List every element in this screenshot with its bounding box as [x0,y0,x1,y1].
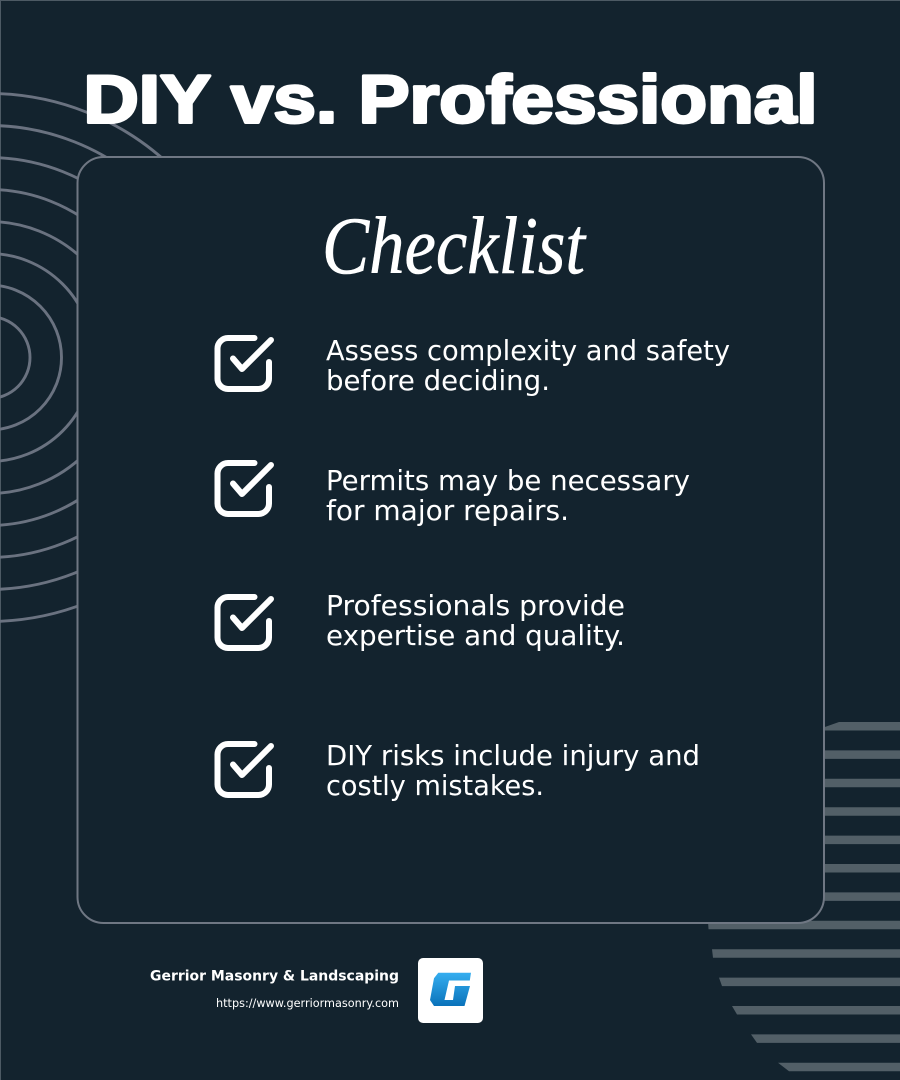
text: item 1: before deciding. [326,364,550,397]
text: item 2: for major repairs. [326,494,569,527]
title: DIY vs. Professional [84,62,818,138]
text: item 2: Permits may be necessary [326,464,690,497]
text: item 3: expertise and quality. [326,619,625,652]
decorative concentric circles [0,94,253,622]
text: item 3: Professionals provide [326,589,625,622]
heading: Checklist: Checklist [322,200,587,291]
footer: website url: https://www.gerriormasonry.com [216,996,399,1010]
panel: checklist card [78,157,824,923]
checklist item 4 [218,739,709,802]
icon: checkbox 4 [218,744,271,795]
decorative stripes [708,722,900,1071]
text: item 1: Assess complexity and safety [326,334,730,367]
icon: checkbox 1 [218,338,271,389]
text: item 4: costly mistakes. [326,769,544,802]
icon: checkbox 2 [218,463,271,514]
logo: Gerrior G badge [418,958,483,1023]
text: item 4: DIY risks include injury and [326,739,700,772]
checklist item 2 [218,463,699,527]
checklist item 3 [218,589,634,652]
checklist item 1 [218,334,739,397]
icon: checkbox 3 [218,597,271,648]
footer: company name: Gerrior Masonry & Landscaping [150,968,399,984]
